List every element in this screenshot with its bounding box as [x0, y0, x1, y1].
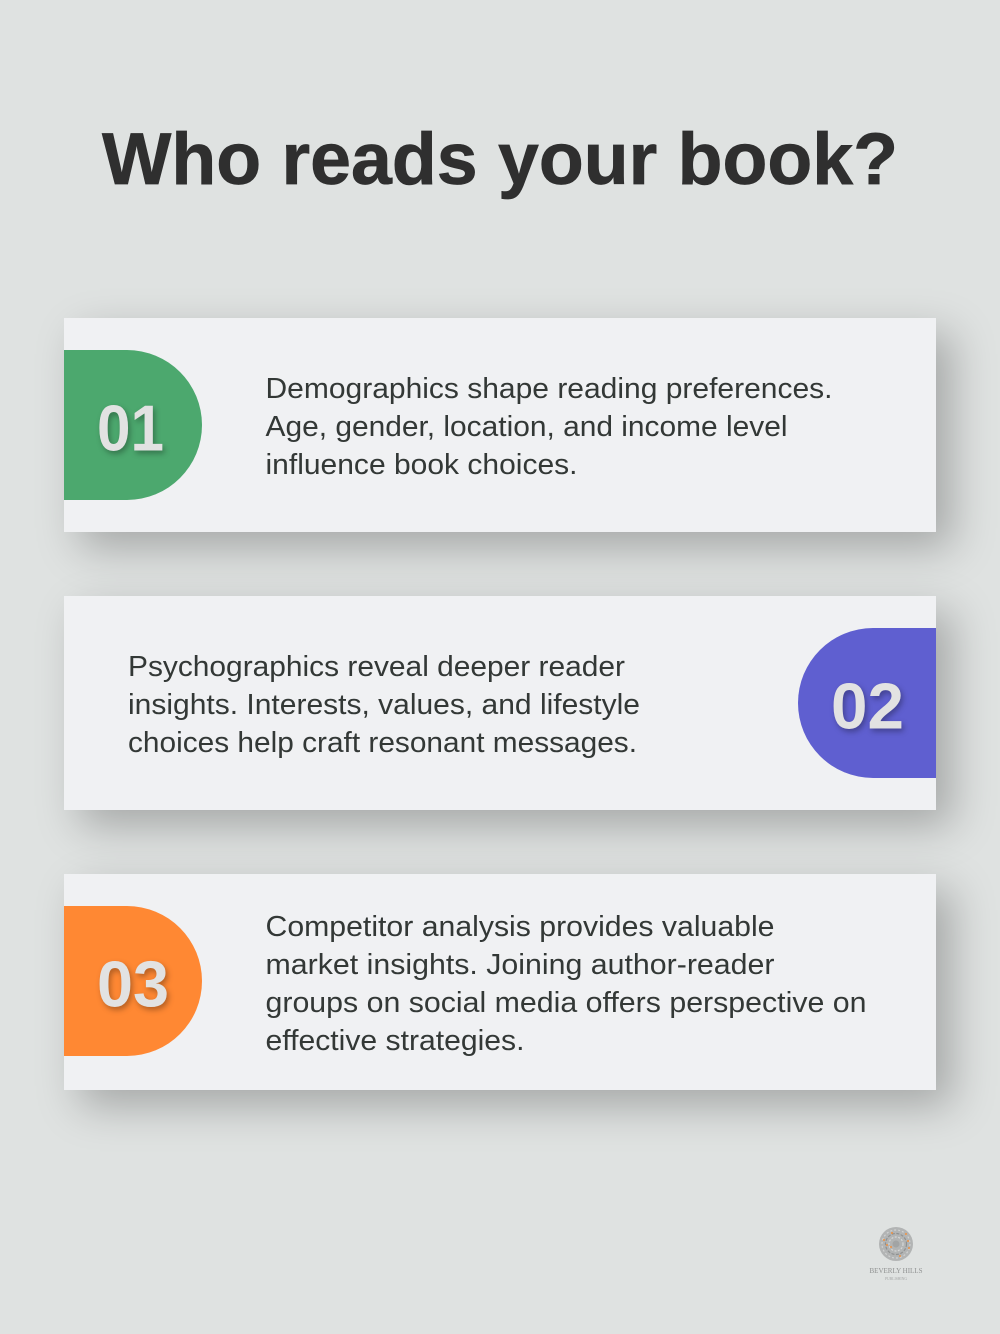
text: competitor analysis: [266, 911, 867, 1057]
text: competitor analysis: groups on social media offers perspective on: [266, 987, 867, 1019]
text: psychographics: choices help craft resonant messages.: [128, 727, 637, 759]
text: psychographics: [128, 651, 640, 759]
badge: 03: [64, 906, 202, 1056]
badge: 03: 03: [97, 948, 169, 1020]
logo: Beverly Hills Publishing: PUBLISHING: [885, 1276, 907, 1281]
panel: 02 psychographics: [64, 596, 936, 810]
text: demographics: Demographics shape reading preferences.: [266, 373, 832, 405]
title: Who reads your book?: [102, 119, 898, 200]
text: competitor analysis: effective strategies.: [266, 1025, 524, 1057]
text: psychographics: insights. Interests, values, and lifestyle: [128, 689, 640, 721]
badge: 01: [64, 350, 202, 500]
text: psychographics: Psychographics reveal deeper reader: [128, 651, 625, 683]
badge: 02: [798, 628, 936, 778]
logo: Beverly Hills Publishing: BEVERLY HILLS: [870, 1267, 923, 1275]
text: demographics: [266, 373, 832, 481]
panel: 01 demographics: [64, 318, 936, 532]
panel: 03 competitor analysis: [64, 874, 936, 1090]
badge: 02: 02: [831, 670, 904, 742]
text: demographics: Age, gender, location, and income level: [266, 411, 788, 443]
text: competitor analysis: Competitor analysis provides valuable: [266, 911, 774, 943]
badge: 01: 01: [97, 392, 164, 464]
text: demographics: influence book choices.: [266, 449, 578, 481]
text: competitor analysis: market insights. Joining author-reader: [266, 949, 775, 981]
